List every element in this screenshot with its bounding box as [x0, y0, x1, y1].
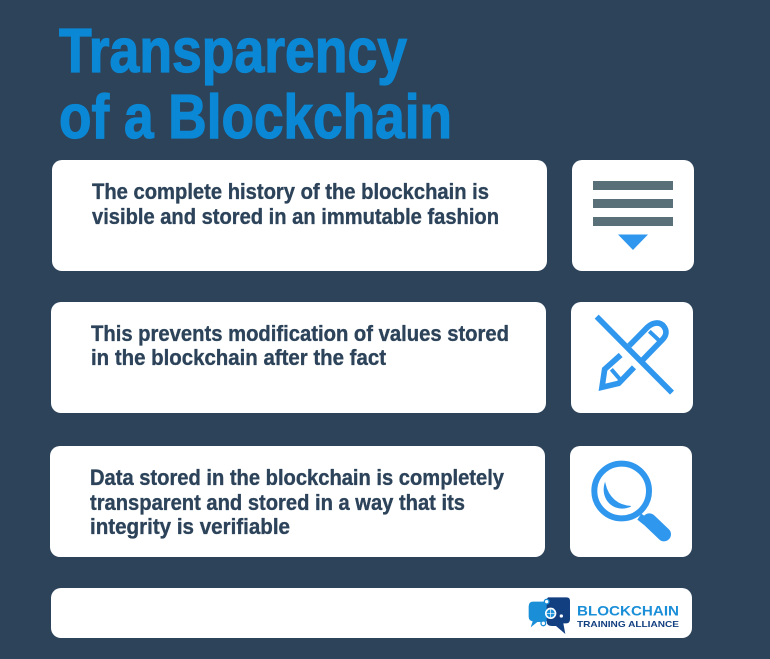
title: Transparency — [59, 17, 407, 86]
title — [59, 17, 452, 152]
panel: modification text card — [51, 302, 546, 413]
panel: crossed pencil icon card — [571, 302, 693, 413]
panel: history text card: visible and stored in an immutable fashion — [92, 204, 499, 229]
panel: data text card: Data stored in the blockchain is completely — [90, 465, 505, 490]
panel: magnifier icon card — [570, 446, 692, 557]
panel: data text card — [50, 446, 545, 557]
panel: data text card: integrity is verifiable — [90, 514, 290, 539]
panel: modification text card: in the blockchain after the fact — [91, 345, 387, 370]
panel: history text card: The complete history of the blockchain is — [92, 179, 489, 204]
panel: history text card — [52, 160, 547, 271]
panel: ledger icon card — [572, 160, 694, 271]
panel: data text card: transparent and stored in a way that its — [90, 490, 465, 515]
panel: modification text card: This prevents modification of values stored — [91, 321, 509, 346]
title: of a Blockchain — [59, 83, 452, 152]
panel: logo bar — [51, 588, 692, 638]
logo: Blockchain Training Alliance: TRAINING ALLIANCE — [577, 619, 679, 629]
logo: Blockchain Training Alliance — [529, 597, 679, 634]
logo: Blockchain Training Alliance: BLOCKCHAIN — [577, 604, 679, 618]
